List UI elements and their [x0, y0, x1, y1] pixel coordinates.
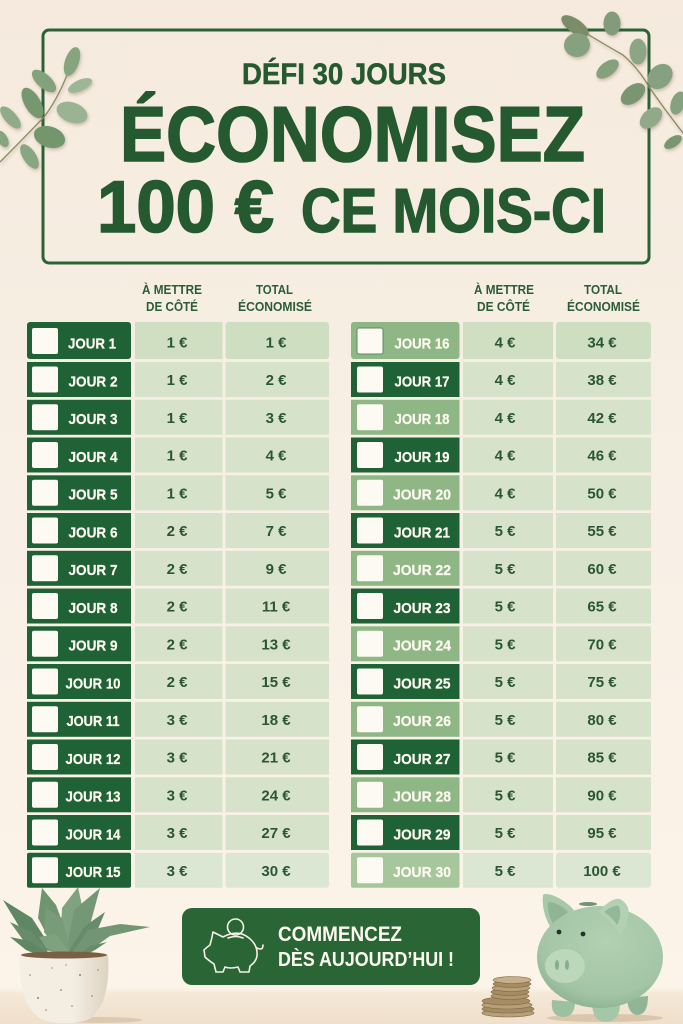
row: jour 28: 90 € [587, 787, 617, 804]
row: jour 23: 65 € [587, 598, 617, 616]
row: jour 22: 60 € [587, 561, 617, 578]
row: jour 23: 5 € [495, 598, 516, 616]
row: jour 12: 21 € [261, 750, 291, 766]
cta text: COMMENCEZ [278, 923, 402, 946]
row: jour 24: JOUR 24 [393, 638, 452, 655]
row: jour 13 [27, 777, 329, 812]
row: jour 7: 2 € [167, 561, 188, 578]
row: jour 26: 5 € [495, 712, 516, 729]
row: jour 13: 24 € [261, 787, 291, 804]
row: jour 9 [27, 626, 329, 661]
row: jour 20: 4 € [495, 485, 516, 502]
row: jour 19 [351, 438, 651, 472]
row: jour 10: 2 € [167, 674, 188, 691]
row: jour 19: JOUR 19 [394, 449, 450, 466]
row: jour 30: JOUR 30 [393, 864, 451, 881]
column headers: left table: DE CÔTÉ [146, 299, 198, 314]
row: jour 8: JOUR 8 [68, 600, 118, 617]
row: jour 7: JOUR 7 [68, 562, 118, 579]
row: jour 13: JOUR 13 [66, 789, 120, 806]
row: jour 8: 11 € [262, 598, 291, 616]
row: jour 9: 2 € [167, 636, 188, 653]
column headers: right table: DE CÔTÉ [477, 299, 530, 314]
icon: piggy bank outline [204, 919, 263, 972]
row: jour 29 [351, 815, 651, 850]
row: jour 28: JOUR 28 [393, 789, 451, 806]
row: jour 3 [27, 400, 329, 435]
icon: right leaf branch [558, 11, 683, 152]
row: jour 4: 4 € [266, 448, 287, 464]
row: jour 1: JOUR 1 [68, 336, 116, 352]
eyebrow: défi 30 jours: DÉFI 30 JOURS [242, 57, 446, 91]
row: jour 12: 3 € [167, 750, 188, 766]
row: jour 15: 3 € [167, 863, 188, 880]
row: jour 25: JOUR 25 [394, 675, 450, 692]
column headers: right table [474, 282, 640, 314]
row: jour 18: 42 € [587, 410, 617, 427]
row: jour 2: 2 € [266, 372, 287, 389]
row: jour 21: 55 € [587, 523, 617, 540]
row: jour 11: 3 € [167, 712, 188, 729]
row: jour 5: JOUR 5 [68, 487, 118, 504]
row: jour 27: 5 € [495, 750, 516, 766]
row: jour 17: JOUR 17 [394, 373, 450, 390]
row: jour 17: 4 € [495, 372, 516, 389]
icon: coin stacks [482, 976, 534, 1017]
row: jour 25: 5 € [495, 674, 516, 691]
row: jour 25 [351, 664, 651, 699]
panel: left table, days 1 to 15 [27, 322, 329, 888]
row: jour 21 [351, 513, 651, 548]
row: jour 9: JOUR 9 [68, 638, 118, 655]
row: jour 18 [351, 400, 651, 435]
row: jour 30 [351, 853, 651, 888]
column headers: left table: À METTRE [142, 282, 202, 297]
row: jour 26: JOUR 26 [393, 713, 451, 730]
row: jour 3: 1 € [167, 410, 188, 427]
row: jour 15 [27, 853, 329, 888]
row: jour 10: JOUR 10 [66, 675, 120, 692]
column headers: right table: À METTRE [474, 282, 534, 297]
row: jour 28 [351, 777, 651, 812]
row: jour 24: 5 € [495, 636, 516, 653]
row: jour 4: 1 € [167, 448, 188, 464]
row: jour 5: 1 € [167, 485, 188, 502]
row: jour 27 [351, 740, 651, 774]
row: jour 20 [351, 475, 651, 510]
row: jour 2: JOUR 2 [68, 373, 118, 390]
row: jour 26 [351, 702, 651, 737]
row: jour 14: JOUR 14 [66, 826, 121, 843]
heading: ce mois-ci: CE MOIS-CI [301, 177, 606, 246]
row: jour 22 [351, 551, 651, 586]
column headers: left table: TOTAL [256, 282, 293, 297]
row: jour 19: 46 € [587, 448, 617, 464]
row: jour 20: JOUR 20 [393, 487, 451, 504]
row: jour 9: 13 € [261, 636, 291, 653]
column headers: right table: ÉCONOMISÉ [567, 299, 640, 314]
row: jour 24: 70 € [587, 636, 617, 653]
row: jour 18: JOUR 18 [394, 411, 450, 428]
row: jour 16: 4 € [495, 334, 516, 351]
row: jour 2: 1 € [167, 372, 188, 389]
row: jour 12 [27, 740, 329, 774]
row: jour 14: 27 € [261, 825, 291, 842]
row: jour 16 [351, 322, 651, 359]
heading: économisez: ÉCONOMISEZ [120, 90, 585, 178]
row: jour 7 [27, 551, 329, 586]
row: jour 16: JOUR 16 [394, 336, 450, 352]
row: jour 11: 18 € [261, 712, 291, 729]
row: jour 14: 3 € [167, 825, 188, 842]
row: jour 27: JOUR 27 [394, 751, 450, 768]
row: jour 11 [27, 702, 329, 737]
title frame [43, 30, 649, 263]
panel: right table, days 16 to 30 [351, 322, 651, 888]
row: jour 11: JOUR 11 [66, 713, 120, 730]
column headers: left table: ÉCONOMISÉ [238, 299, 312, 314]
row: jour 13: 3 € [167, 787, 188, 804]
row: jour 26: 80 € [587, 712, 617, 729]
row: jour 10 [27, 664, 329, 699]
callout: commencez button [182, 908, 480, 985]
row: jour 3: JOUR 3 [68, 411, 118, 428]
row: jour 18: 4 € [495, 410, 516, 427]
row: jour 6: 7 € [266, 523, 287, 540]
row: jour 1 [27, 322, 329, 359]
row: jour 22: JOUR 22 [393, 562, 451, 579]
row: jour 29: JOUR 29 [394, 826, 450, 843]
row: jour 21: 5 € [495, 523, 516, 540]
row: jour 8: 2 € [167, 598, 188, 616]
row: jour 19: 4 € [495, 448, 516, 464]
row: jour 1: 1 € [266, 334, 287, 351]
row: jour 1: 1 € [167, 334, 188, 351]
row: jour 5 [27, 475, 329, 510]
row: jour 17 [351, 362, 651, 397]
column headers: left table [142, 282, 312, 314]
row: jour 30: 5 € [495, 863, 516, 880]
title block [97, 57, 606, 248]
row: jour 6: JOUR 6 [68, 524, 118, 541]
row: jour 29: 5 € [495, 825, 516, 842]
row: jour 6 [27, 513, 329, 548]
column headers: right table: TOTAL [584, 282, 622, 297]
row: jour 10: 15 € [261, 674, 291, 691]
row: jour 5: 5 € [266, 485, 287, 502]
heading: 100 euros: 100 € [97, 167, 274, 248]
icon: green piggy bank [537, 894, 663, 1022]
row: jour 30: 100 € [583, 863, 621, 880]
callout: commencez button: DÈS AUJOURD’HUI ! [278, 948, 454, 971]
row: jour 6: 2 € [167, 523, 188, 540]
row: jour 15: JOUR 15 [66, 864, 120, 881]
row: jour 23 [351, 588, 651, 624]
row: jour 4: JOUR 4 [68, 449, 118, 466]
row: jour 16: 34 € [587, 334, 617, 351]
row: jour 4 [27, 438, 329, 472]
row: jour 14 [27, 815, 329, 850]
row: jour 28: 5 € [495, 787, 516, 804]
row: jour 17: 38 € [587, 372, 617, 389]
row: jour 29: 95 € [587, 825, 617, 842]
row: jour 12: JOUR 12 [66, 751, 120, 768]
row: jour 22: 5 € [495, 561, 516, 578]
row: jour 2 [27, 362, 329, 397]
icon: left leaf branch [0, 45, 94, 172]
row: jour 21: JOUR 21 [394, 524, 450, 541]
row: jour 24 [351, 626, 651, 661]
row: jour 3: 3 € [266, 410, 287, 427]
row: jour 15: 30 € [261, 863, 291, 880]
row: jour 8 [27, 588, 329, 624]
row: jour 23: JOUR 23 [394, 600, 450, 617]
icon: potted plant [3, 887, 150, 1023]
row: jour 20: 50 € [587, 485, 617, 502]
row: jour 27: 85 € [587, 750, 617, 766]
row: jour 7: 9 € [266, 561, 287, 578]
row: jour 25: 75 € [587, 674, 617, 691]
